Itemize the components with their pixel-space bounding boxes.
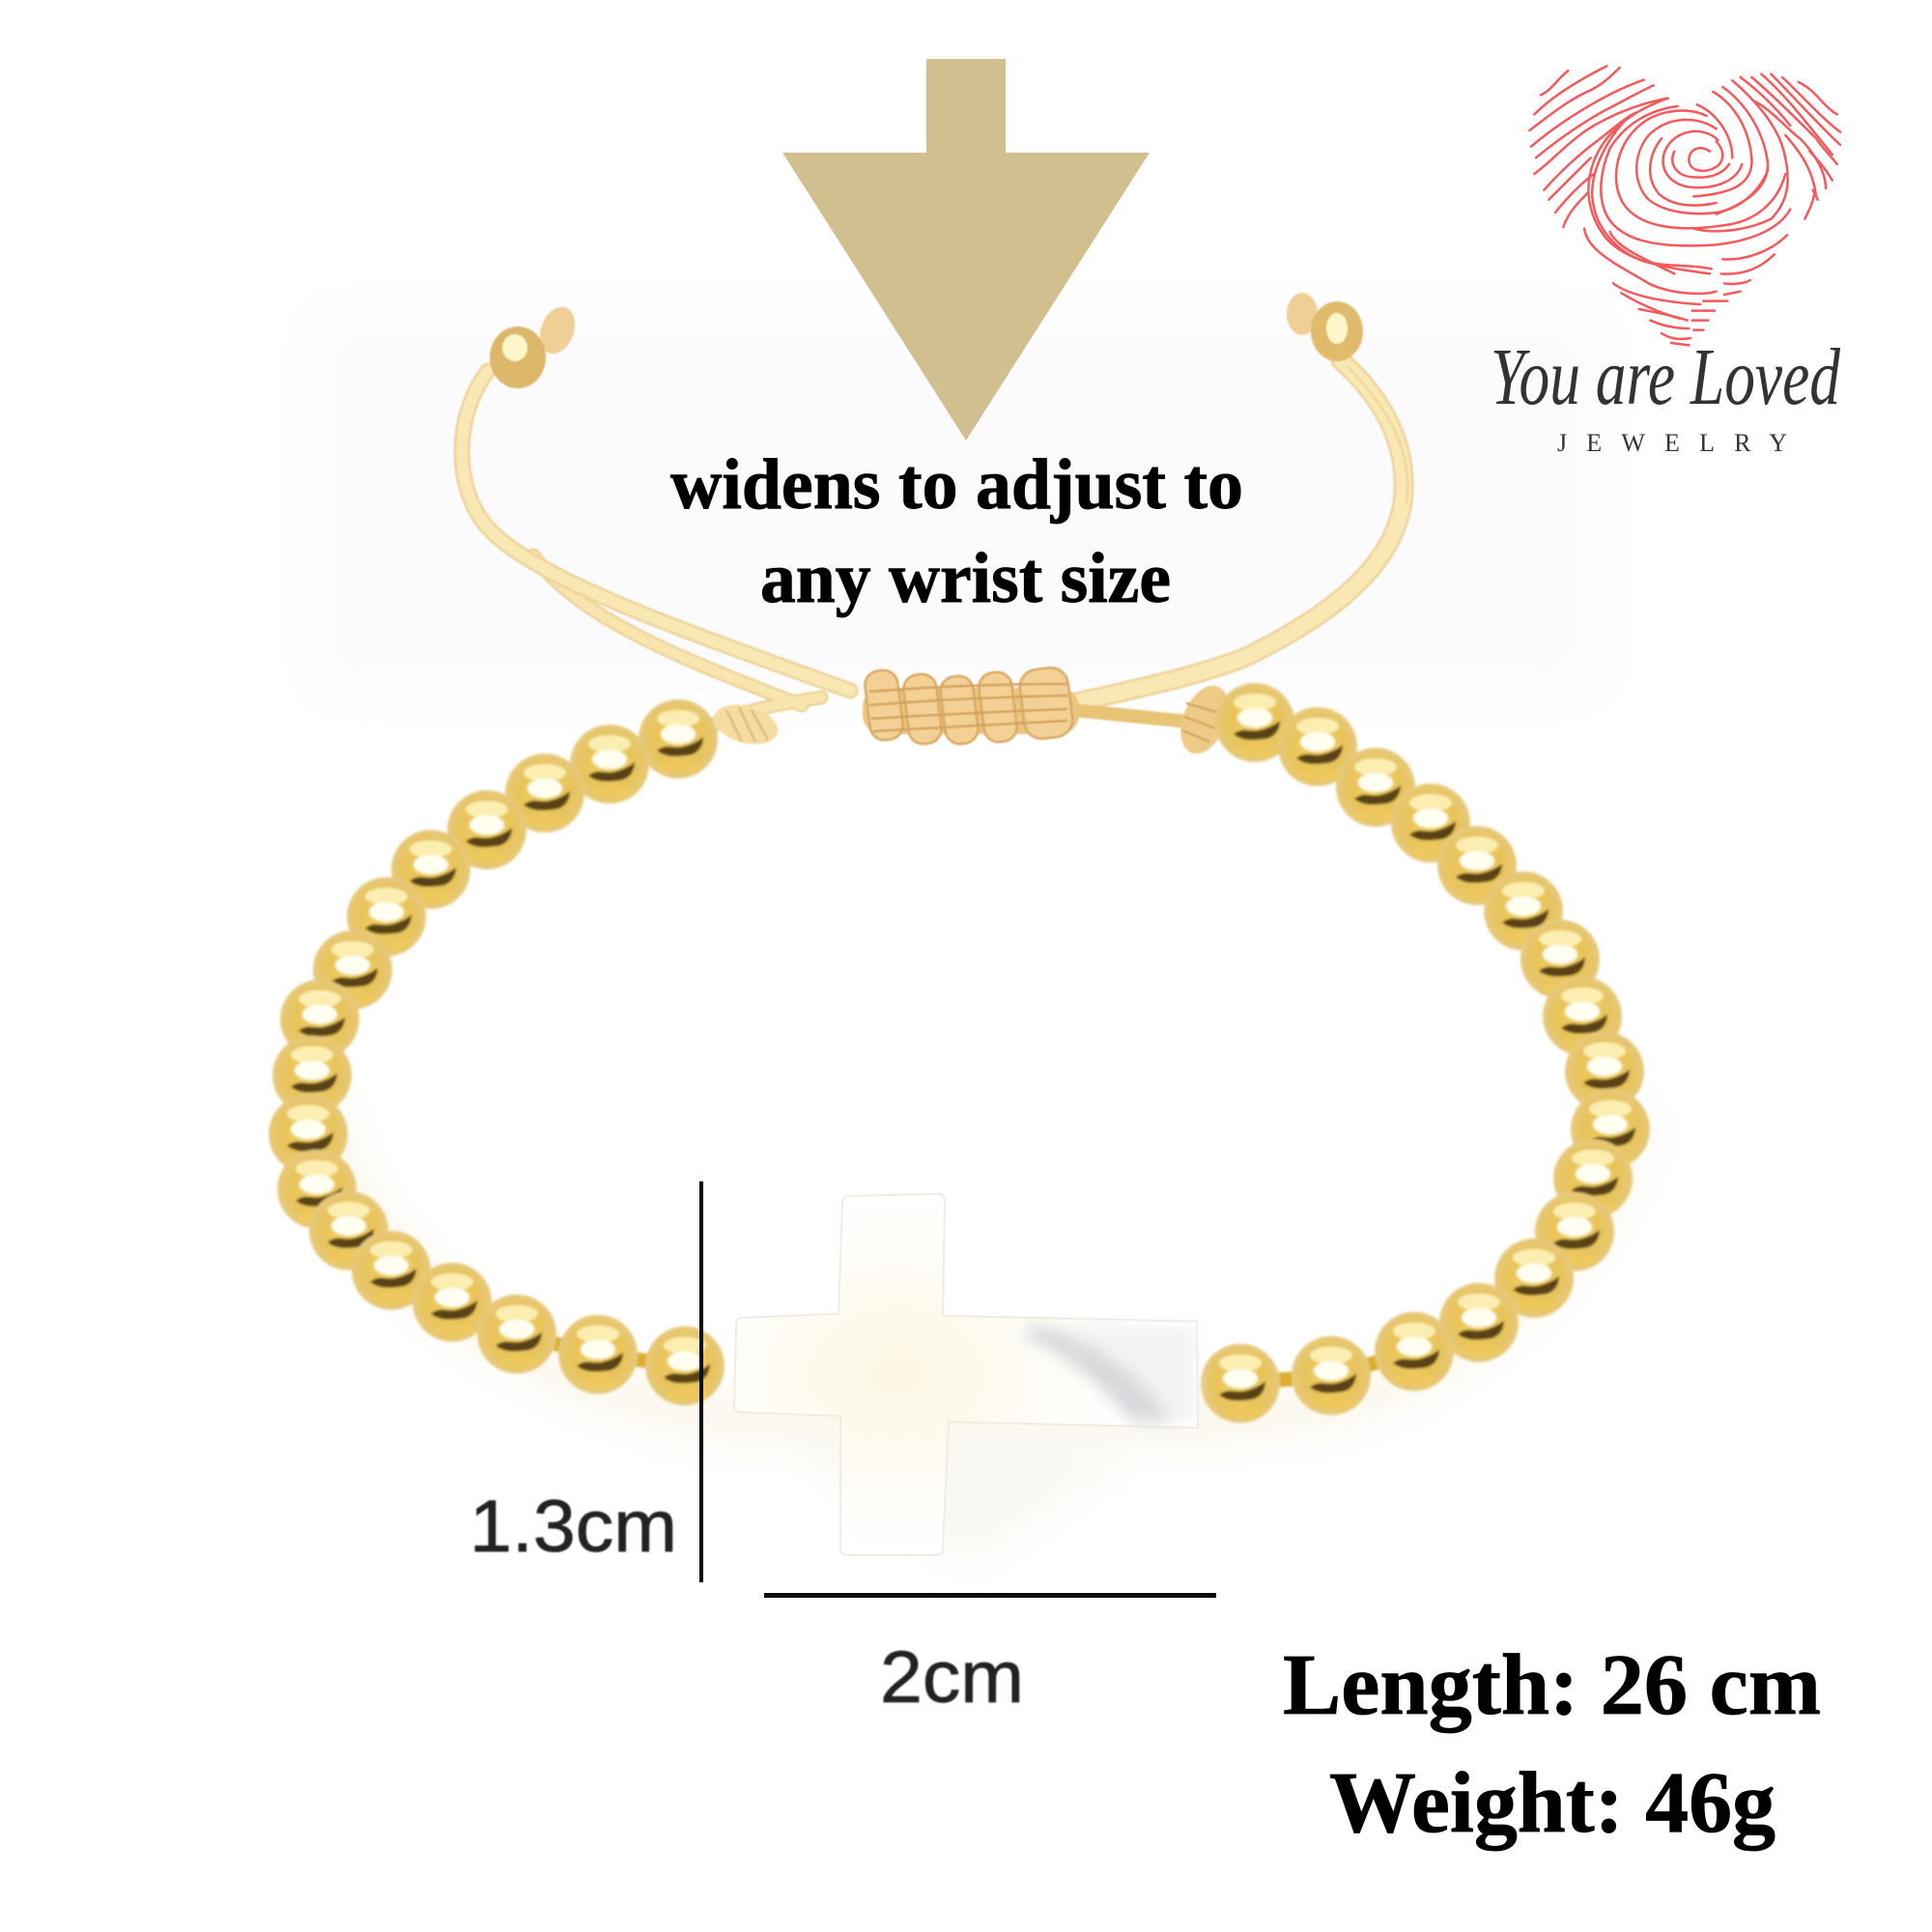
dimension line: height — [699, 1181, 703, 1582]
specs: length and weight: Length: 26 cm — [1283, 1637, 1821, 1733]
specs: length and weight — [1283, 1637, 1821, 1851]
photo backdrop — [309, 309, 1604, 696]
specs: length and weight: Weight: 46g — [1329, 1755, 1776, 1851]
caption: widens to adjust: any wrist size — [760, 539, 1171, 618]
soft bead shadow — [319, 1092, 1633, 1420]
label: 1.3cm: 1.3cm — [469, 1486, 677, 1568]
cross shadow — [773, 1430, 1140, 1565]
dimension line: width — [764, 1593, 1216, 1598]
cord end right — [1287, 293, 1363, 361]
logo wordmark: JEWELRY — [1557, 429, 1787, 457]
down arrow — [782, 59, 1150, 440]
caption: widens to adjust — [670, 445, 1243, 618]
gold beads left — [269, 699, 724, 1406]
cross sheen — [1026, 1325, 1196, 1422]
sliding knot — [863, 666, 1079, 746]
gold beads right — [1201, 683, 1650, 1423]
mother of pearl cross — [734, 1194, 1198, 1555]
small knot left — [709, 698, 782, 751]
bracelet photo — [269, 293, 1650, 1565]
label: 2cm: 2cm — [880, 1636, 1024, 1719]
adjustable cords — [462, 360, 1407, 724]
icon: fingerprint heart — [1529, 66, 1840, 345]
small knot right — [1172, 678, 1237, 761]
logo — [1491, 66, 1841, 457]
cord end left — [490, 302, 582, 388]
caption: widens to adjust: widens to adjust to — [670, 445, 1243, 525]
